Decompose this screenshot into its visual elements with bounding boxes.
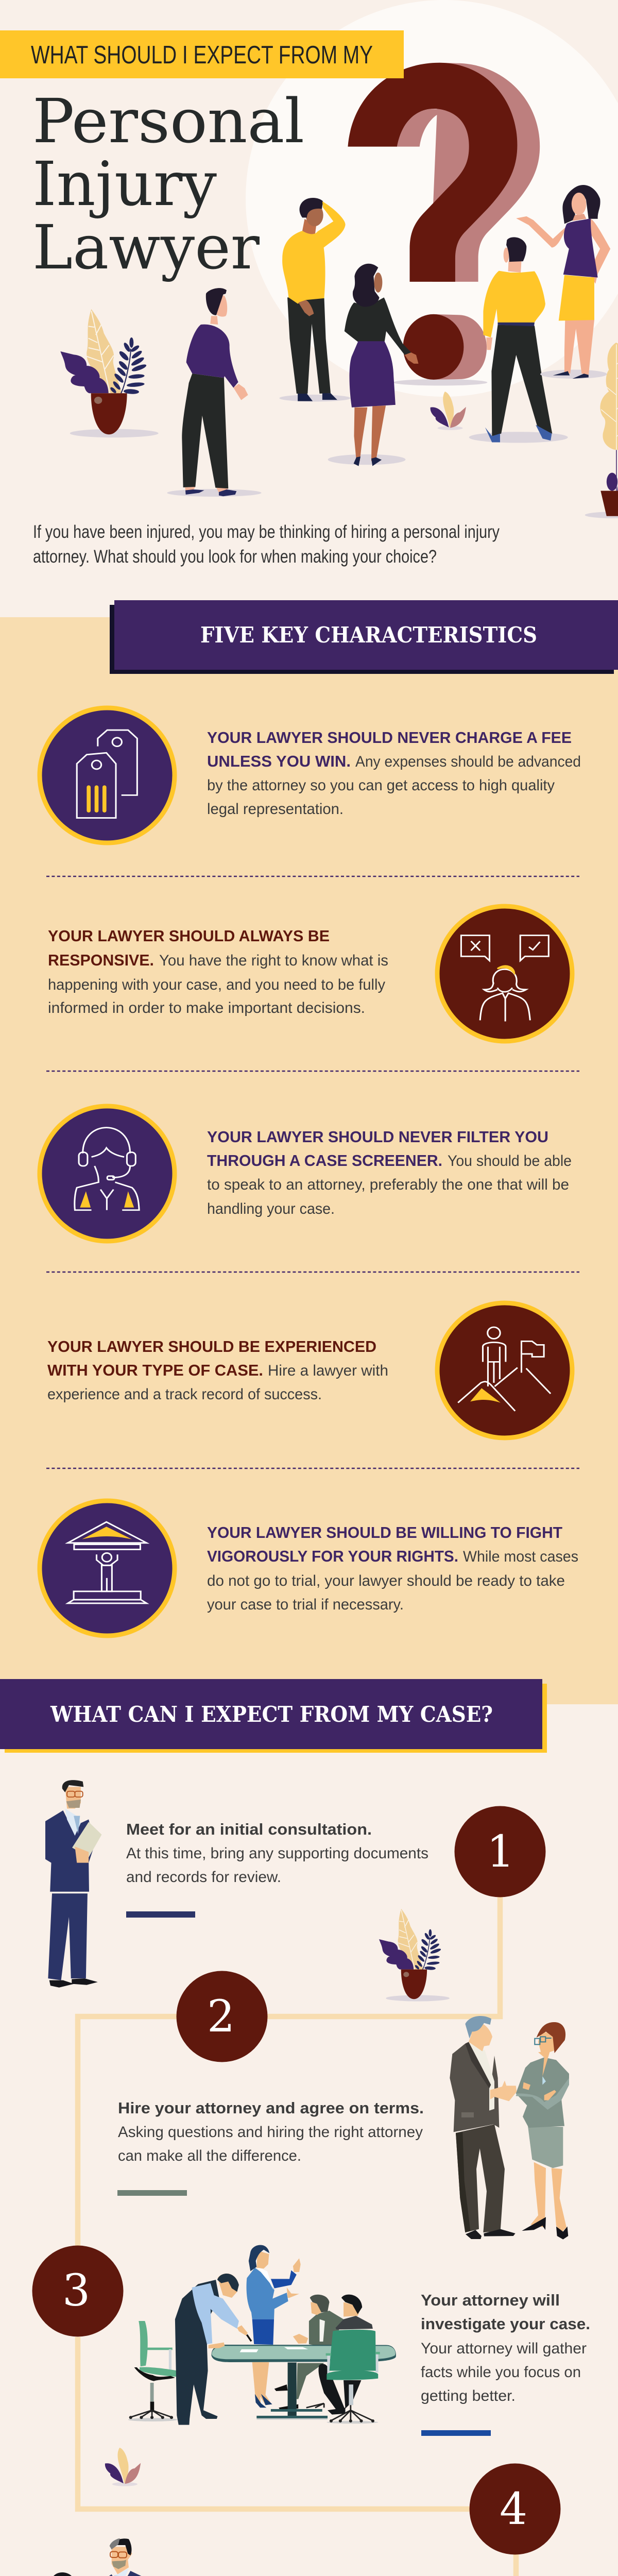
title: Lawyer <box>32 212 260 283</box>
title: Injury <box>32 148 217 219</box>
text block: YOUR LAWYER SHOULD ALWAYS BE <box>48 927 330 945</box>
text block: While most cases <box>463 1548 578 1565</box>
icon: potted plant, step 1 <box>379 1909 450 2002</box>
step 3 text: Your attorney will <box>421 2291 560 2309</box>
figure: man in yellow scratching head <box>279 198 351 402</box>
step 3 number circle <box>32 2245 124 2337</box>
text block <box>207 1523 578 1613</box>
icon: potted plant in hero <box>60 309 159 437</box>
text block: by the attorney so you can get access to high quality <box>207 777 555 794</box>
step 1 text <box>126 1820 428 1918</box>
figure: woman in purple skirt <box>328 264 418 466</box>
text block: experience and a track record of success. <box>47 1386 322 1403</box>
text block <box>207 728 581 818</box>
heading band: five key characteristics: FIVE KEY CHARACTERISTICS <box>200 622 537 648</box>
step 3 text: getting better. <box>421 2387 516 2404</box>
text block: THROUGH A CASE SCREENER. <box>207 1151 442 1170</box>
figure: attorney and client shaking hands, step 2 <box>450 2016 569 2240</box>
intro text: attorney. What should you look for when making your choice? <box>33 547 437 567</box>
text block: to speak to an attorney, preferably the one that will be <box>207 1176 569 1193</box>
step 1 text: and records for review. <box>126 1869 281 1886</box>
figure: man in yellow from behind <box>469 237 568 443</box>
text block: your case to trial if necessary. <box>207 1596 404 1613</box>
step 1 number circle <box>454 1806 546 1897</box>
step 1 number circle: 1 <box>487 1826 514 1877</box>
heading band: what can I expect: WHAT CAN I EXPECT FROM MY CASE? <box>50 1702 493 1727</box>
text block <box>47 1337 388 1403</box>
banner: what should I expect <box>0 30 404 78</box>
peach section background <box>0 617 618 1704</box>
question mark illustration <box>348 63 540 386</box>
text block: YOUR LAWYER SHOULD NEVER FILTER YOU <box>207 1128 548 1146</box>
icon: tall hero plant <box>585 343 618 518</box>
step 1 text: Meet for an initial consultation. <box>126 1820 372 1838</box>
icon: price tags <box>40 708 175 843</box>
text block: You should be able <box>448 1153 572 1170</box>
text block: You have the right to know what is <box>159 952 388 969</box>
step 3 text: facts while you focus on <box>421 2364 581 2381</box>
heading band: five key characteristics <box>110 600 618 674</box>
text block: RESPONSIVE. <box>48 951 154 969</box>
step 2 number circle <box>176 1971 268 2062</box>
text block: handling your case. <box>207 1200 335 1217</box>
panel: characteristic 4 experienced <box>47 1303 572 1438</box>
step 4 number circle: 4 <box>500 2484 527 2535</box>
figure: meeting around table, step 3 <box>128 2245 396 2425</box>
icon: person holding courthouse roof <box>40 1501 175 1636</box>
step 3 text <box>421 2291 590 2436</box>
title: Personal <box>32 86 304 157</box>
banner: what should I expect: WHAT SHOULD I EXPECT FROM MY <box>31 41 373 69</box>
step 3 text: investigate your case. <box>421 2315 590 2333</box>
icon: small plant, step 3 <box>105 2448 141 2486</box>
icon: person on mountain with flag <box>437 1303 572 1438</box>
step 4 number circle <box>470 2464 560 2554</box>
text block: Hire a lawyer with <box>268 1362 388 1379</box>
text block: legal representation. <box>207 801 344 818</box>
text block <box>207 1128 572 1217</box>
step 3 text: Your attorney will gather <box>421 2340 587 2357</box>
panel: characteristic 2 responsive <box>48 906 572 1041</box>
icon: small hero plant <box>431 392 466 430</box>
intro text <box>33 522 500 567</box>
text block: YOUR LAWYER SHOULD BE EXPERIENCED <box>47 1337 376 1355</box>
step 2 number circle: 2 <box>207 1991 235 2042</box>
text block: UNLESS YOU WIN. <box>207 752 351 770</box>
cream section background <box>0 1704 618 2576</box>
hero background <box>0 0 618 617</box>
text block: VIGOROUSLY FOR YOUR RIGHTS. <box>207 1547 458 1565</box>
figure: lawyer with folder, step 1 <box>45 1780 101 1988</box>
hero pale circle <box>246 0 618 397</box>
panel: characteristic 3 case screener <box>40 1106 572 1241</box>
icon: headset operator <box>40 1106 175 1241</box>
text block: YOUR LAWYER SHOULD BE WILLING TO FIGHT <box>207 1523 562 1541</box>
text block: informed in order to make important decisions. <box>48 999 365 1016</box>
figure: woman gesturing <box>516 185 610 379</box>
figure: man in purple sweater <box>167 288 262 497</box>
title <box>32 86 304 283</box>
step 2 text: Asking questions and hiring the right attorney <box>118 2124 423 2141</box>
step 2 text: Hire your attorney and agree on terms. <box>118 2099 424 2117</box>
step 2 text <box>117 2099 424 2196</box>
step 2 text: can make all the difference. <box>118 2147 301 2164</box>
timeline connector <box>78 1897 516 2576</box>
text block: Any expenses should be advanced <box>355 753 581 770</box>
panel: characteristic 5 fight vigorously <box>40 1501 578 1636</box>
step 3 number circle: 3 <box>62 2265 90 2316</box>
panel: characteristic 1 no fee <box>40 708 581 843</box>
step 1 text: At this time, bring any supporting documents <box>126 1845 428 1862</box>
text block: WITH YOUR TYPE OF CASE. <box>47 1361 263 1379</box>
text block: YOUR LAWYER SHOULD NEVER CHARGE A FEE <box>207 728 572 747</box>
icon: woman with choices <box>437 906 572 1041</box>
heading band: what can I expect <box>0 1679 547 1753</box>
text block <box>48 927 388 1016</box>
intro text: If you have been injured, you may be thinking of hiring a personal injury <box>33 522 500 542</box>
text block: happening with your case, and you need to be fully <box>48 976 385 993</box>
figure: client and lawyer, step 4 <box>38 2538 149 2576</box>
text block: do not go to trial, your lawyer should be ready to take <box>207 1572 565 1589</box>
